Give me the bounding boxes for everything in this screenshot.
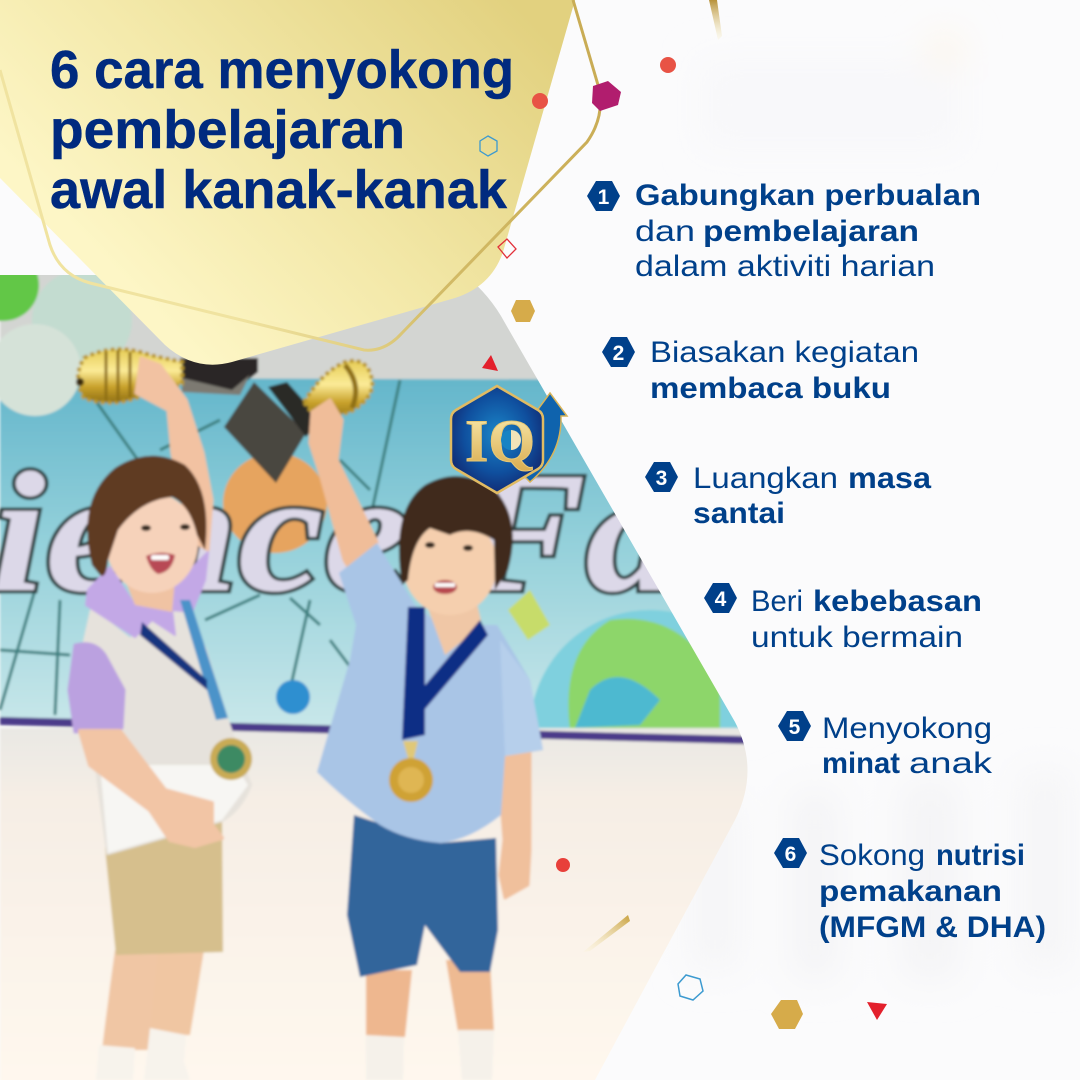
gold hexagon bbox=[771, 1000, 803, 1029]
legs and socks bbox=[366, 970, 412, 1037]
item 3: masa bbox=[848, 462, 931, 495]
photo: two children with trophies and medals bbox=[0, 249, 780, 1080]
item 2 bbox=[602, 336, 919, 405]
balloons bbox=[0, 275, 132, 418]
purple sleeve bbox=[69, 644, 124, 732]
item 2: membaca buku bbox=[650, 372, 891, 405]
item 6: Sokong bbox=[819, 839, 925, 872]
item 6 bbox=[774, 838, 1046, 944]
red triangle bbox=[482, 355, 498, 371]
number badge bbox=[645, 462, 678, 492]
raised arm bbox=[310, 400, 377, 580]
legs and socks bbox=[102, 950, 160, 1050]
number badge bbox=[774, 838, 807, 868]
shorts bbox=[105, 810, 223, 955]
title bbox=[50, 40, 514, 220]
dot bbox=[660, 57, 676, 73]
item 4: untuk bermain bbox=[751, 621, 963, 654]
neck bbox=[428, 605, 482, 656]
gold streak bbox=[709, 0, 722, 40]
item 1: pembelajaran bbox=[703, 215, 919, 248]
neck bbox=[126, 585, 176, 613]
gold title panel bbox=[0, 0, 575, 365]
item 1: Gabungkan perbualan bbox=[635, 179, 981, 212]
red outline diamond bbox=[498, 239, 516, 258]
banner lettering: ience Fa bbox=[0, 438, 682, 628]
item 5: anak bbox=[909, 747, 993, 780]
gold hexagon bbox=[511, 300, 535, 322]
head bbox=[404, 526, 497, 610]
item 3: santai bbox=[693, 497, 785, 530]
number badge bbox=[704, 583, 737, 613]
shorts bbox=[347, 815, 498, 977]
item 6: pemakanan bbox=[819, 875, 1002, 908]
item 6: (MFGM & DHA) bbox=[819, 911, 1046, 944]
shirt bbox=[72, 598, 250, 853]
item 3 bbox=[645, 462, 931, 530]
brain bbox=[501, 430, 521, 450]
right child bbox=[310, 400, 543, 1080]
number badge: 1 bbox=[598, 186, 610, 209]
dot bbox=[556, 858, 570, 872]
floor bbox=[0, 728, 780, 1080]
title: 6 cara menyokong bbox=[50, 40, 514, 100]
number badge: 5 bbox=[789, 716, 801, 739]
item 5: Menyokong bbox=[822, 712, 992, 745]
ribbons bbox=[180, 600, 228, 720]
title: pembelajaran bbox=[50, 100, 405, 160]
gold streak bbox=[583, 915, 630, 952]
medal bbox=[389, 758, 433, 802]
hexagon bbox=[451, 386, 543, 493]
lower arm and hand bbox=[80, 731, 222, 846]
item 4: kebebasan bbox=[813, 585, 982, 618]
item 3: Luangkan bbox=[693, 462, 838, 495]
blue outline hexagon bbox=[678, 975, 703, 1000]
number badge: 6 bbox=[785, 843, 796, 866]
number badge: 4 bbox=[715, 588, 727, 611]
IQ badge bbox=[451, 386, 567, 493]
red triangle bbox=[867, 1002, 887, 1020]
item 4: Beri bbox=[751, 585, 803, 618]
item 5 bbox=[778, 711, 993, 780]
collar bbox=[86, 552, 208, 637]
science fair banner bbox=[0, 376, 738, 730]
number badge: 2 bbox=[613, 342, 624, 365]
right arm bbox=[497, 745, 530, 898]
decorative shapes bbox=[480, 0, 887, 1029]
arrow bbox=[518, 393, 567, 482]
number badge bbox=[602, 337, 635, 367]
number badge bbox=[778, 711, 811, 741]
number badge bbox=[587, 181, 620, 211]
item 2: Biasakan kegiatan bbox=[650, 336, 919, 369]
dot bbox=[532, 93, 548, 109]
left child bbox=[69, 358, 252, 1080]
item 5: minat bbox=[822, 747, 900, 780]
item 1: dan bbox=[635, 215, 695, 248]
head bbox=[106, 493, 198, 593]
item 1: dalam aktiviti harian bbox=[635, 250, 935, 283]
number badge: 3 bbox=[656, 467, 667, 490]
item 4 bbox=[704, 583, 982, 654]
shirt bbox=[317, 543, 543, 843]
title: awal kanak-kanak bbox=[50, 160, 508, 220]
item 6: nutrisi bbox=[936, 839, 1025, 872]
blue outline hexagon bbox=[480, 136, 497, 156]
ribbons bbox=[402, 607, 425, 740]
IQ letters: IQ bbox=[465, 408, 535, 474]
trophies bbox=[76, 349, 372, 483]
gold outline bbox=[0, 0, 600, 350]
magenta hexagon bbox=[592, 81, 621, 111]
medal bbox=[210, 738, 252, 780]
raised arm bbox=[136, 358, 212, 550]
item 1 bbox=[587, 179, 981, 283]
wall bbox=[0, 275, 538, 380]
